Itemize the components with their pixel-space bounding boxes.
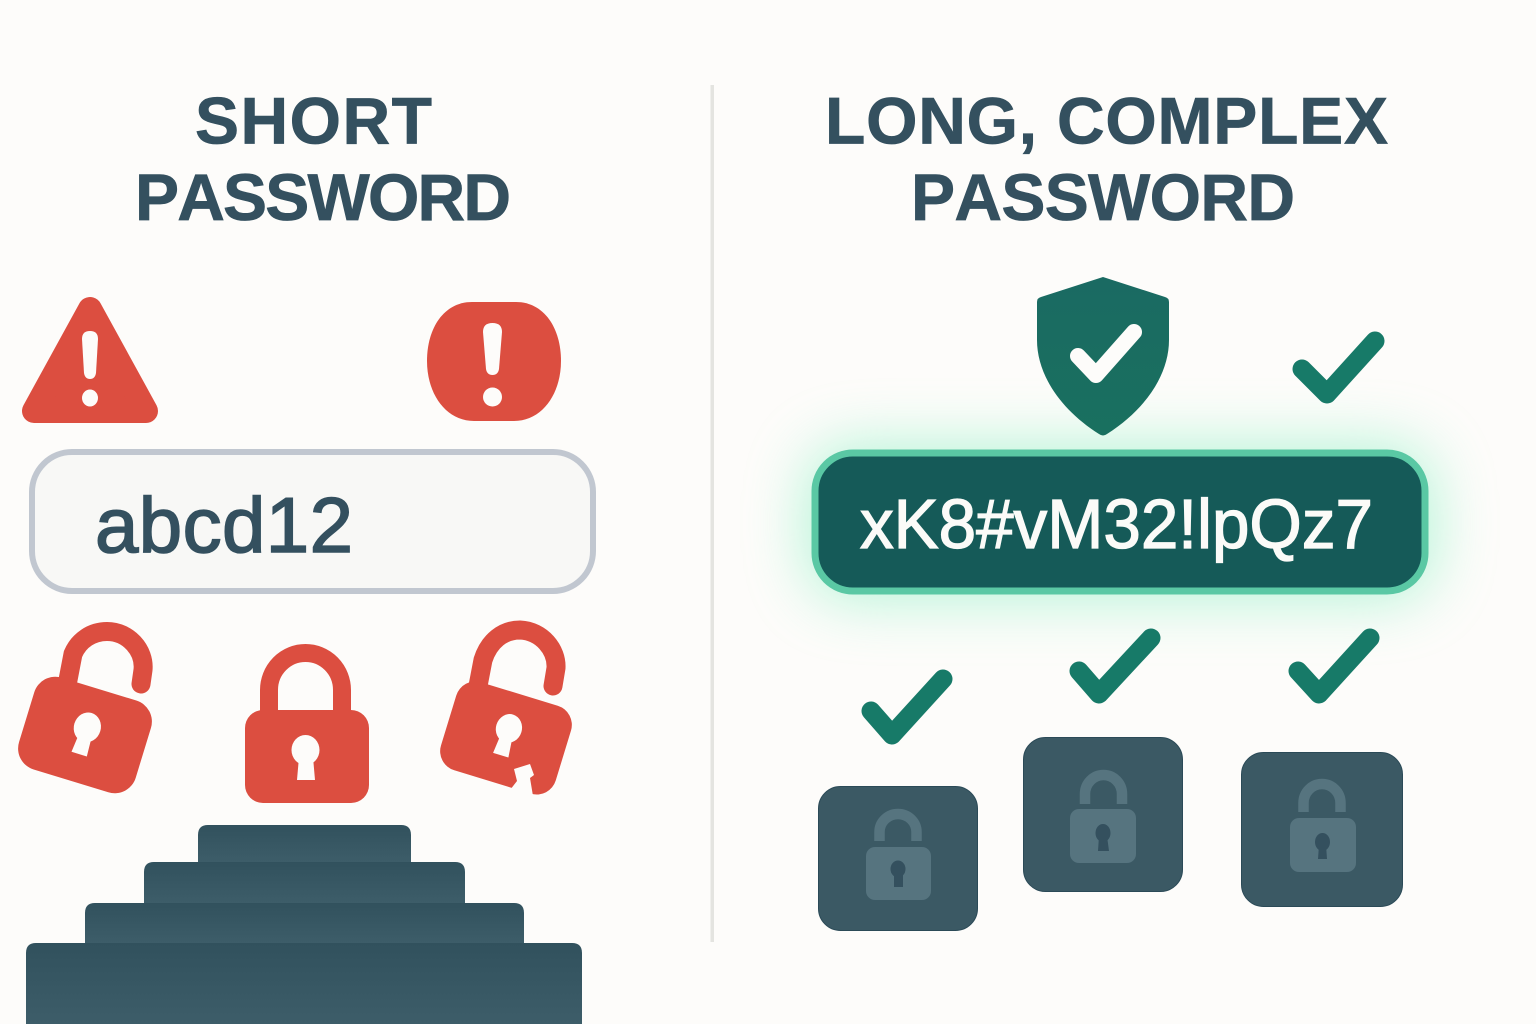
heading: long complex password bbox=[825, 84, 1388, 234]
heading: short password bbox=[135, 84, 511, 234]
icon: check lower right bbox=[1298, 638, 1370, 694]
panel: short password bbox=[13, 84, 593, 1024]
panel: long complex password bbox=[806, 84, 1434, 930]
password field: abcd12: abcd12 bbox=[95, 481, 353, 569]
icon: broken open padlock right bbox=[435, 630, 577, 800]
stepped pyramid bbox=[26, 825, 582, 1024]
icon: check lower left bbox=[871, 679, 943, 735]
heading: short password: SHORT bbox=[195, 84, 432, 158]
heading: short password: PASSWORD bbox=[135, 160, 511, 234]
icon: check top right bbox=[1302, 341, 1375, 394]
password field: abcd12 bbox=[32, 452, 593, 591]
icon: warning circle bbox=[427, 302, 561, 421]
locked tile right bbox=[1242, 752, 1402, 906]
icon: check lower center bbox=[1079, 638, 1151, 694]
password field: xK8#vM32!lpQz7 bbox=[806, 444, 1434, 600]
locked tile center bbox=[1024, 738, 1182, 892]
icon: warning triangle bbox=[34, 309, 146, 411]
locked tile left bbox=[818, 786, 978, 930]
heading: long complex password: PASSWORD bbox=[911, 160, 1295, 234]
heading: long complex password: LONG, COMPLEX bbox=[825, 84, 1388, 158]
icon: open padlock left bbox=[13, 632, 157, 799]
icon: closed padlock center bbox=[245, 653, 369, 803]
icon: shield with check bbox=[1037, 277, 1169, 436]
password field: xK8#vM32!lpQz7: xK8#vM32!lpQz7 bbox=[860, 485, 1373, 563]
